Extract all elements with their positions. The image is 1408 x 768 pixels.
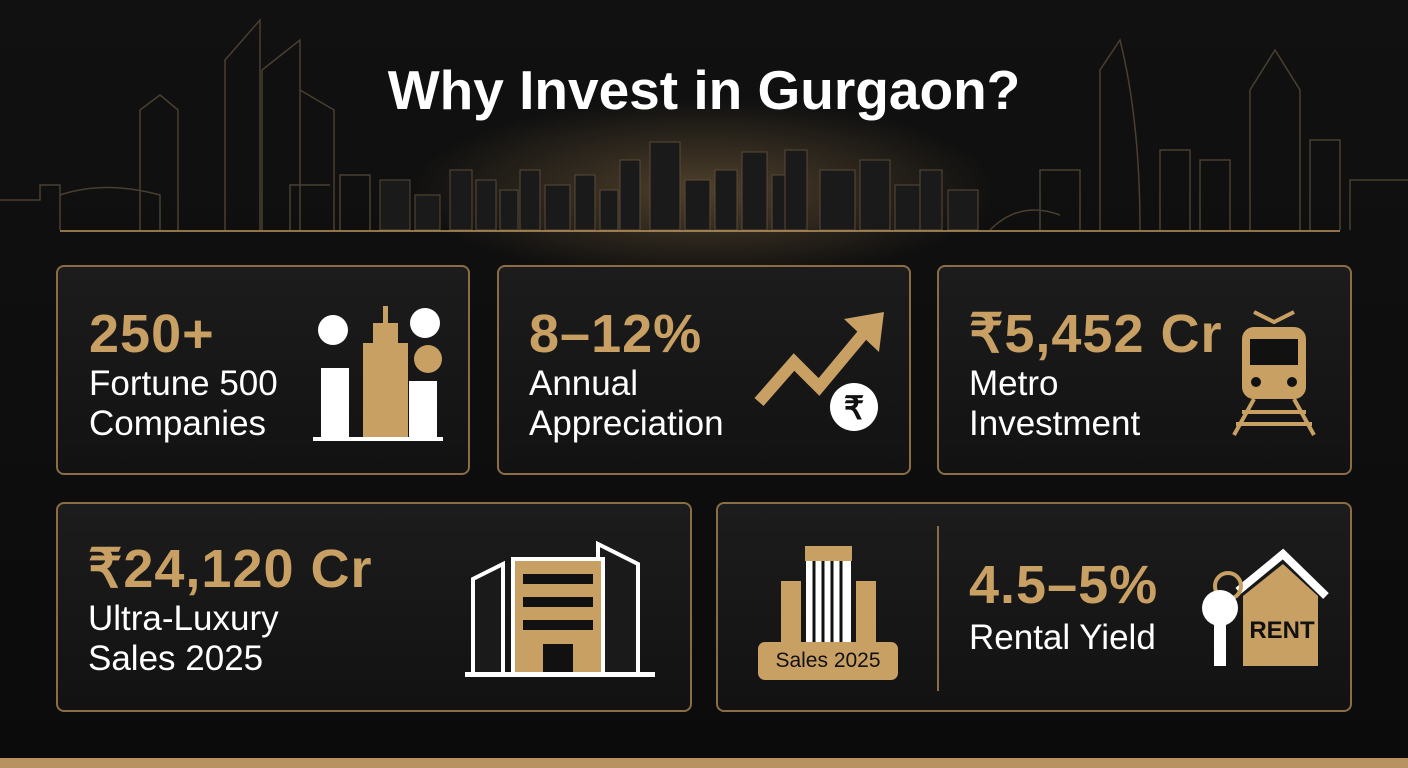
label: annual appreciation — [529, 364, 724, 443]
icon: rising arrow with rupee — [754, 312, 884, 431]
icon: key and house — [1202, 548, 1329, 666]
label: ultra luxury sales — [88, 599, 279, 678]
label: ultra luxury sales: Sales 2025 — [88, 639, 263, 678]
icon: tower with Sales 2025 badge — [758, 546, 898, 680]
badge: sales 2025: Sales 2025 — [775, 649, 881, 672]
label: fortune 500: Companies — [89, 404, 266, 443]
panel: appreciation — [497, 265, 911, 475]
icon: train — [1232, 310, 1316, 436]
icon: building — [465, 540, 655, 677]
panel: ultra-luxury — [56, 502, 692, 712]
stat: metro: ₹5,452 Cr — [969, 304, 1223, 364]
label: fortune 500: Fortune 500 — [89, 364, 278, 403]
panel: fortune 500 — [56, 265, 470, 475]
bottom gold bar — [0, 758, 1408, 768]
label: annual appreciation: Annual — [529, 364, 638, 403]
stat: 8-12%: 8–12% — [529, 304, 702, 364]
stat: rental: 4.5–5% — [969, 555, 1158, 615]
icon: buildings with logos — [313, 306, 443, 441]
title: Why Invest in Gurgaon? — [388, 59, 1020, 121]
skyline — [0, 18, 1408, 232]
icon: rising arrow with rupee: ₹ — [844, 390, 864, 426]
stat: 24120: ₹24,120 Cr — [88, 539, 373, 599]
label: metro investment: Investment — [969, 404, 1140, 443]
label: fortune 500 — [89, 364, 278, 443]
stat: 250+: 250+ — [89, 304, 215, 364]
badge: sales 2025 — [758, 642, 898, 680]
label: annual appreciation: Appreciation — [529, 404, 724, 443]
label: metro investment: Metro — [969, 364, 1058, 403]
panel: metro — [937, 265, 1352, 475]
label: metro investment — [969, 364, 1140, 443]
label: ultra luxury sales: Ultra-Luxury — [88, 599, 279, 638]
icon: key and house: RENT — [1249, 617, 1315, 644]
panel: rental yield — [716, 502, 1352, 712]
label: rental yield: Rental Yield — [969, 618, 1156, 657]
